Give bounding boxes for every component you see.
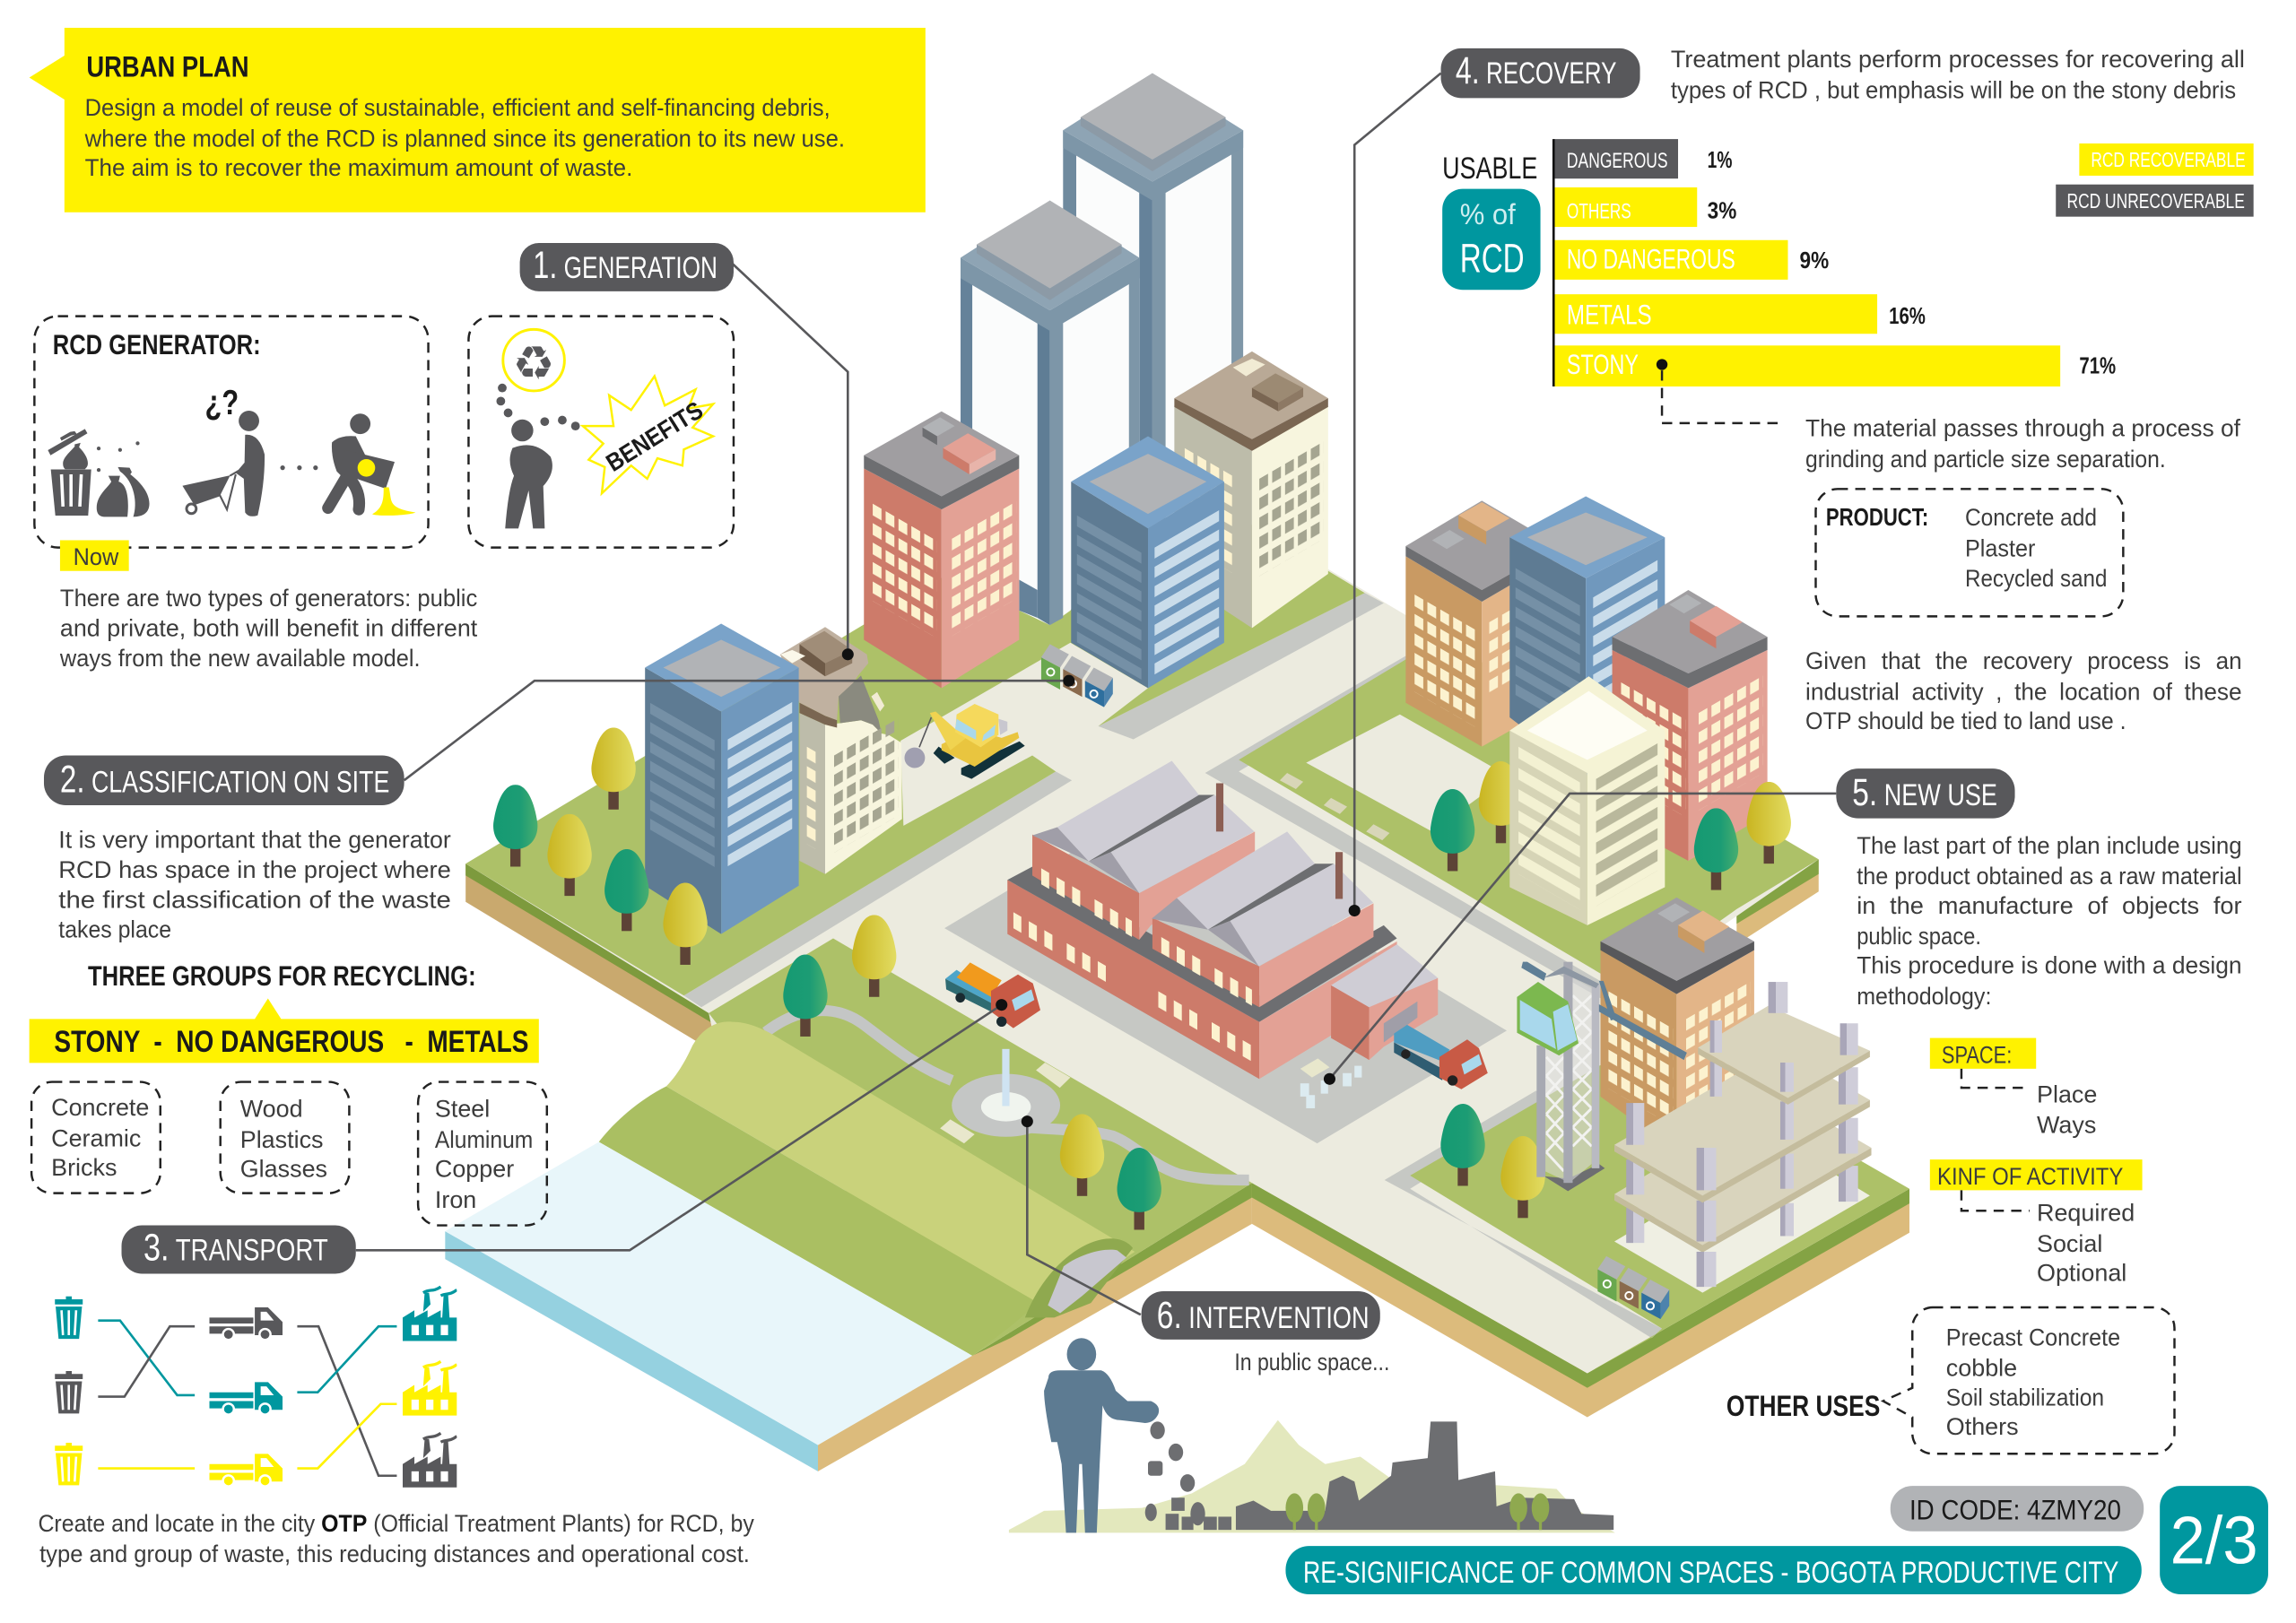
banner: project title bbox=[1285, 1546, 2142, 1594]
list: activity: Optional bbox=[2037, 1260, 2126, 1287]
icon: recycling thought: ♻ bbox=[513, 337, 555, 391]
connector: space bbox=[1961, 1069, 2030, 1088]
text: location of otp: OTP should be tied to land use . bbox=[1805, 707, 2126, 734]
box: other uses: Precast Concrete bbox=[1946, 1324, 2120, 1350]
icon: recycling thought bbox=[503, 329, 564, 391]
text: generators: There are two types of generators: public bbox=[60, 585, 477, 612]
panel: benefits bbox=[468, 317, 734, 548]
connector: activity bbox=[1961, 1190, 2030, 1211]
box: no dangerous materials bbox=[221, 1082, 349, 1193]
tower: glass front bbox=[961, 201, 1139, 625]
heading: usable: USABLE bbox=[1442, 152, 1537, 186]
ground surface bbox=[465, 458, 1909, 1373]
text: recovery bbox=[1671, 46, 2245, 103]
tag: kind of activity: KINF OF ACTIVITY bbox=[1937, 1163, 2123, 1190]
tower: glass back bbox=[1063, 74, 1243, 586]
building: orange back right bbox=[1405, 500, 1560, 747]
box: other uses: Others bbox=[1946, 1413, 2019, 1440]
icon: thought dots bbox=[496, 384, 580, 430]
icon: person with wheelbarrow: ¿? bbox=[205, 384, 239, 422]
box: no dangerous materials: Plastics bbox=[240, 1126, 324, 1153]
bar labels: DANGEROUS bbox=[1567, 149, 1668, 173]
bar values bbox=[1708, 146, 2116, 378]
box: other uses: Soil stabilization bbox=[1946, 1384, 2104, 1410]
icon: recycling bins on block A bbox=[1041, 644, 1113, 707]
platform side walls bbox=[465, 859, 1909, 1471]
text: urban plan description bbox=[84, 94, 845, 181]
text: generators: ways from the new available model. bbox=[59, 645, 421, 672]
banner: groups bbox=[30, 998, 539, 1063]
panel: urban plan bbox=[30, 28, 926, 213]
small containers in yard bbox=[1300, 1058, 1361, 1108]
tag: now bbox=[60, 540, 129, 571]
building: blue centre bbox=[1071, 437, 1224, 688]
text: location of otp: industrial activity , the location of these bbox=[1805, 678, 2242, 705]
text: location of otp: Given that the recovery process is an bbox=[1805, 647, 2242, 674]
text: classification: takes place bbox=[58, 916, 171, 943]
building: pink right bbox=[1613, 590, 1768, 861]
list: activity: Required bbox=[2037, 1200, 2135, 1227]
box: stony materials: Ceramic bbox=[51, 1124, 141, 1151]
icon: trash can and bags bbox=[48, 429, 150, 516]
text: recovery: Treatment plants perform processes for recovering all bbox=[1671, 46, 2245, 73]
chart: usable percent of rcd bbox=[1442, 139, 2254, 423]
bar labels: OTHERS bbox=[1567, 199, 1631, 223]
box: product: Recycled sand bbox=[1965, 565, 2107, 592]
box: metals: Steel bbox=[435, 1096, 490, 1123]
box: product bbox=[1815, 489, 2123, 616]
trees bbox=[493, 727, 1791, 1229]
building under construction bbox=[1614, 982, 1872, 1293]
text: new use bbox=[1857, 832, 2242, 1010]
list: space: Place bbox=[2037, 1081, 2097, 1107]
factory block 1 bbox=[1032, 761, 1255, 940]
panel: rcd generator bbox=[34, 317, 429, 548]
tag: now: Now bbox=[74, 543, 119, 570]
factory bbox=[1007, 761, 1438, 1079]
building: blue left bbox=[645, 624, 799, 934]
box: no dangerous materials: Glasses bbox=[240, 1156, 327, 1183]
building: pink left bbox=[864, 412, 1019, 688]
isometric city illustration bbox=[445, 74, 1909, 1471]
crane bbox=[1517, 962, 1687, 1191]
bar labels bbox=[1567, 149, 1735, 380]
bar values: 16% bbox=[1889, 302, 1926, 329]
bar values: 3% bbox=[1708, 196, 1736, 223]
text: urban plan description: Design a model of reuse of sustainable, efficient and self-financing debris, bbox=[85, 94, 831, 121]
bar values: 71% bbox=[2079, 352, 2116, 378]
lawn: block C bbox=[1385, 1038, 1909, 1373]
leader: generation bbox=[731, 262, 854, 660]
text: new use: This procedure is done with a design bbox=[1857, 952, 2242, 979]
leader: recovery bbox=[1349, 74, 1441, 916]
small trees bbox=[1285, 1493, 1549, 1530]
label: 4 recovery: 4. RECOVERY bbox=[1456, 49, 1617, 91]
icon: benefits burst bbox=[583, 377, 713, 493]
person throwing debris bbox=[1044, 1338, 1159, 1532]
bar labels: STONY bbox=[1567, 349, 1639, 380]
building: demolished beige bbox=[780, 627, 902, 874]
text: classification: It is very important that the generator bbox=[58, 826, 451, 853]
tag: space: SPACE: bbox=[1942, 1041, 2012, 1068]
icon: factories bbox=[403, 1287, 457, 1488]
bar values: 1% bbox=[1708, 146, 1732, 173]
text: transport bbox=[38, 1510, 754, 1567]
skyline bbox=[1236, 1421, 1613, 1530]
icon: benefits burst: BENEFITS bbox=[601, 395, 708, 477]
leader: new use bbox=[1324, 794, 1836, 1085]
box: stony materials bbox=[31, 1082, 161, 1193]
icon: recycling bins on block C bbox=[1597, 1256, 1669, 1319]
text: new use: methodology: bbox=[1857, 983, 1991, 1010]
lawn: block B bbox=[1205, 636, 1819, 1000]
mountains bbox=[1009, 1420, 1615, 1532]
heading: other uses: OTHER USES bbox=[1726, 1389, 1880, 1422]
text: transport: Create and locate in the city OTP (Official Treatment Plants) for RCD, by bbox=[38, 1510, 754, 1537]
text: new use: in the manufacture of objects for bbox=[1857, 892, 2242, 919]
falling debris bbox=[1145, 1421, 1231, 1530]
hill bands bbox=[599, 1021, 1135, 1356]
list: activity bbox=[2037, 1200, 2135, 1287]
excavator with wrecking ball bbox=[904, 704, 1025, 779]
text: urban plan description: where the model of the RCD is planned since its generation to its new use. bbox=[84, 125, 845, 152]
text: generators: and private, both will benefit in different bbox=[60, 614, 478, 641]
illustration: bogota skyline with person bbox=[1009, 1338, 1615, 1532]
heading: urban plan: URBAN PLAN bbox=[86, 50, 249, 83]
box: other uses bbox=[1883, 1307, 2174, 1454]
box: no dangerous materials: Wood bbox=[240, 1096, 303, 1123]
box: metals: Iron bbox=[435, 1186, 476, 1213]
badge: percent of rcd: RCD bbox=[1460, 236, 1525, 282]
legend bbox=[2056, 143, 2254, 217]
bar values: 9% bbox=[1800, 247, 1829, 273]
box: product: Plaster bbox=[1965, 534, 2035, 561]
building: beige back bbox=[1174, 352, 1328, 628]
bar labels: NO DANGEROUS bbox=[1567, 244, 1735, 275]
text: recovery: types of RCD , but emphasis will be on the stony debris bbox=[1671, 76, 2236, 103]
text: location of otp bbox=[1805, 647, 2242, 734]
text: new use: The last part of the plan include using bbox=[1857, 832, 2242, 859]
badge: percent of rcd bbox=[1442, 189, 1541, 290]
icon: person with wheelbarrow bbox=[182, 384, 265, 516]
leader: transport bbox=[356, 999, 1007, 1250]
label: 5 new use: 5. NEW USE bbox=[1852, 771, 1997, 813]
box: stony materials: Concrete bbox=[51, 1094, 149, 1121]
text: new use: the product obtained as a raw material bbox=[1857, 863, 2242, 890]
text: urban plan description: The aim is to recover the maximum amount of waste. bbox=[85, 154, 632, 181]
text: new use: public space. bbox=[1857, 923, 1981, 950]
label: 2 classification on site: 2. CLASSIFICATION ON SITE bbox=[60, 758, 389, 800]
building: blue right bbox=[1509, 496, 1665, 776]
box: stony materials: Bricks bbox=[51, 1154, 117, 1181]
box: product: Concrete add bbox=[1965, 504, 2097, 531]
lawn: park bbox=[709, 939, 1252, 1356]
gray factory yard bbox=[944, 812, 1507, 1143]
building: cream tower bbox=[1509, 676, 1665, 925]
list: space bbox=[2037, 1081, 2097, 1139]
callout connector: stony bbox=[1657, 359, 1785, 423]
tree behind cream tower bbox=[1479, 761, 1523, 843]
list: activity: Social bbox=[2037, 1230, 2102, 1257]
water bbox=[445, 1141, 972, 1471]
legend: RCD UNRECOVERABLE bbox=[2066, 189, 2245, 213]
banner: groups: STONY - NO DANGEROUS - METALS bbox=[54, 1025, 528, 1059]
truck in park bbox=[945, 962, 1040, 1028]
icon: trash cans bbox=[55, 1297, 83, 1485]
box: product: PRODUCT: bbox=[1826, 503, 1928, 531]
label: 6 intervention: 6. INTERVENTION bbox=[1157, 1294, 1370, 1336]
heading: rcd generator: RCD GENERATOR: bbox=[53, 328, 261, 360]
label: 3 transport: 3. TRANSPORT bbox=[144, 1227, 328, 1269]
badge: id code: ID CODE: 4ZMY20 bbox=[1909, 1495, 2121, 1526]
bar labels: METALS bbox=[1567, 299, 1652, 331]
park paths and fountain bbox=[766, 1011, 1249, 1180]
box: other uses: cobble bbox=[1946, 1355, 2017, 1382]
box: metals: Aluminum bbox=[435, 1126, 533, 1153]
legend: RCD RECOVERABLE bbox=[2091, 148, 2246, 171]
culvert arch bbox=[1025, 1238, 1133, 1317]
badge: page number: 2/3 bbox=[2170, 1503, 2258, 1578]
icon: dots bbox=[280, 465, 317, 470]
text: grinding: grinding and particle size separation. bbox=[1805, 446, 2166, 473]
text: grinding bbox=[1805, 415, 2240, 473]
text: generators bbox=[59, 585, 478, 672]
text: grinding: The material passes through a process of bbox=[1805, 415, 2240, 442]
list: space: Ways bbox=[2037, 1112, 2096, 1139]
box: metals: Copper bbox=[435, 1156, 514, 1183]
lawn: block A bbox=[465, 458, 1384, 1007]
icon: trucks bbox=[209, 1307, 283, 1488]
text: in public space: In public space... bbox=[1234, 1349, 1389, 1376]
bars bbox=[1553, 139, 2060, 386]
badge: id code bbox=[1891, 1486, 2144, 1532]
culvert opening bbox=[1048, 1250, 1126, 1314]
truck at factory bbox=[1394, 1025, 1488, 1089]
factory block 2 bbox=[1152, 831, 1373, 1007]
text: classification: RCD has space in the project where bbox=[58, 856, 451, 883]
label: 2 classification on site bbox=[44, 755, 404, 805]
leader: intervention bbox=[1022, 1115, 1141, 1315]
icon: person pouring drum bbox=[328, 413, 415, 516]
heading: three groups: THREE GROUPS FOR RECYCLING: bbox=[88, 959, 476, 992]
diagram: transport routing bbox=[55, 1287, 457, 1488]
text: classification: the first classification of the waste bbox=[58, 886, 451, 913]
box: metals bbox=[418, 1082, 547, 1226]
routing lines bbox=[98, 1321, 396, 1476]
leader: classification bbox=[404, 675, 1074, 780]
badge: page number bbox=[2160, 1486, 2268, 1594]
icon: thinking person bbox=[505, 420, 552, 528]
label: 1 generation: 1. GENERATION bbox=[533, 244, 718, 286]
factory annex bbox=[1331, 944, 1438, 1060]
text: transport: type and group of waste, this reducing distances and operational cost. bbox=[39, 1541, 750, 1567]
text: classification bbox=[58, 826, 451, 943]
building: orange front bbox=[1600, 898, 1754, 1152]
badge: percent of rcd: % of bbox=[1460, 197, 1517, 230]
